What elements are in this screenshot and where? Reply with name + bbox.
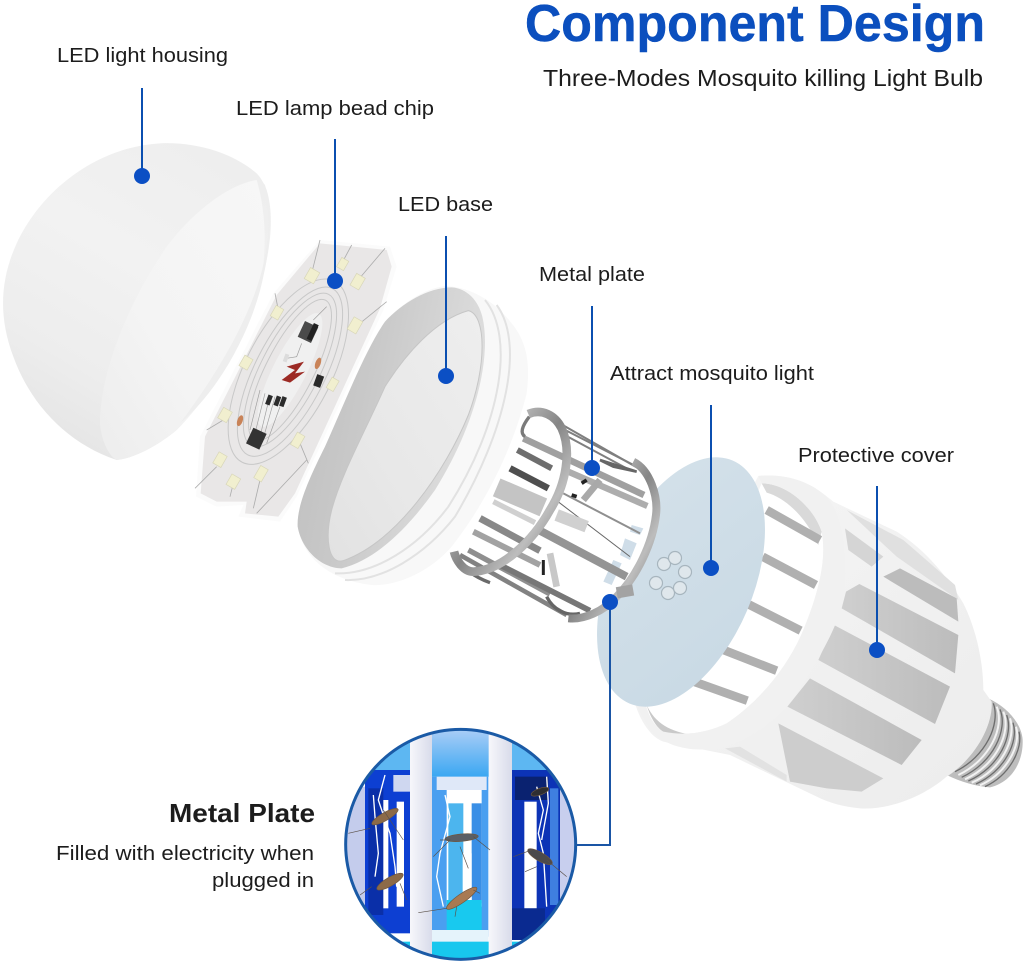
label: LED lamp bead chip — [236, 98, 434, 289]
label: Protective cover — [798, 445, 954, 658]
opening of the cover — [645, 483, 823, 734]
LED chips — [213, 257, 365, 489]
metal plate description: Filled with electricity when — [56, 843, 314, 865]
top grey strips — [847, 510, 958, 600]
label: LED light housing — [57, 45, 228, 184]
centre block — [432, 777, 488, 937]
metal plate cage — [454, 412, 657, 619]
grey windows — [883, 568, 958, 622]
label: Attract mosquito light: Attract mosquito light — [610, 363, 814, 385]
base inner wall — [298, 287, 485, 568]
attract mosquito light disc — [563, 432, 799, 732]
label: LED lamp bead chip: LED lamp bead chip — [236, 98, 434, 120]
ring near disc — [568, 462, 656, 619]
label: Metal plate — [539, 264, 645, 476]
circuit traces — [204, 261, 373, 482]
dome inner crescent — [100, 180, 265, 460]
label: LED light housing: LED light housing — [57, 45, 228, 67]
bars — [460, 438, 647, 615]
metal plate description: plugged in — [212, 870, 314, 892]
metal plate description — [56, 843, 314, 892]
LED beads — [650, 552, 692, 600]
dome rim edge — [180, 175, 270, 423]
inner bars — [689, 510, 820, 701]
cover silhouette — [635, 476, 992, 808]
label: Protective cover: Protective cover — [798, 445, 954, 467]
white vertical bars — [410, 733, 432, 957]
right blue block — [512, 770, 560, 920]
side panels — [347, 786, 365, 906]
socket — [947, 698, 1023, 787]
inset: mosquitoes on electric plate — [340, 720, 583, 963]
ring tab — [616, 584, 634, 598]
label: LED base — [398, 194, 493, 384]
protective cover bulb body — [635, 476, 1023, 808]
inset ring border — [346, 729, 576, 959]
mosquitoes — [370, 785, 554, 912]
LED light housing dome — [3, 143, 271, 460]
label: Metal plate: Metal plate — [539, 264, 645, 286]
label: Attract mosquito light — [610, 363, 814, 576]
label: LED base: LED base — [398, 194, 493, 216]
electronic components — [236, 321, 324, 450]
ring near base — [454, 412, 567, 572]
back rim — [762, 483, 822, 545]
base floor — [328, 311, 482, 561]
LED base — [298, 286, 528, 585]
left blue block — [365, 770, 412, 933]
thread lines — [335, 300, 510, 580]
ring back parts — [522, 417, 529, 437]
arrow: metal plate leader to inset — [576, 594, 618, 845]
subtitle: Three-Modes Mosquito killing Light Bulb — [543, 65, 983, 91]
front ring band — [635, 476, 845, 749]
metal plate heading: Metal Plate — [169, 798, 315, 828]
LED lamp bead chip board — [195, 240, 397, 522]
top thin bars — [555, 421, 648, 474]
lightning bolts — [373, 775, 548, 907]
